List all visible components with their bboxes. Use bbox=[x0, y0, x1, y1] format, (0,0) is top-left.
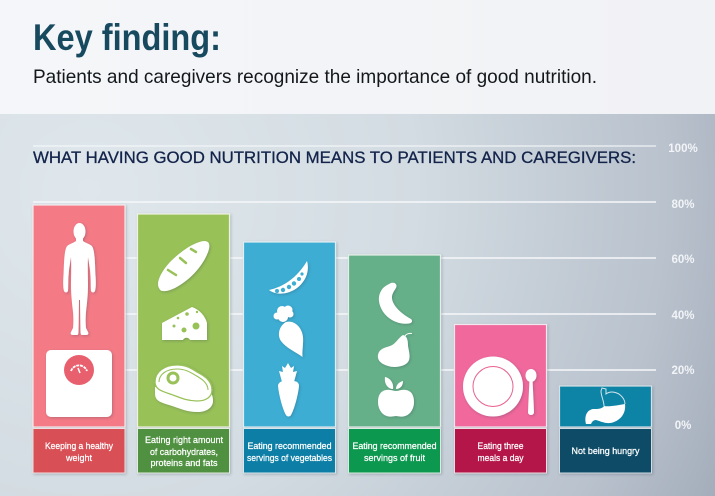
icon: bread bbox=[158, 241, 209, 291]
bar: not being hungry bbox=[560, 386, 652, 473]
bar label: Eating three bbox=[478, 441, 524, 452]
chart heading: WHAT HAVING GOOD NUTRITION MEANS TO PATIENTS AND CAREGIVERS: bbox=[33, 148, 636, 167]
grid lines and axis: 40% bbox=[671, 310, 695, 322]
grid lines and axis: 60% bbox=[671, 254, 695, 266]
chart panel background bbox=[0, 114, 715, 496]
bar label: proteins and fats bbox=[150, 458, 218, 469]
icon: pea pod bbox=[269, 261, 308, 294]
icon: human figure bbox=[63, 223, 96, 335]
bar label: of carbohydrates, bbox=[150, 447, 218, 458]
bar label: Eating recommended bbox=[352, 441, 436, 452]
grid lines and axis: 100% bbox=[668, 143, 698, 155]
bar label: servings of vegetables bbox=[247, 453, 332, 464]
bar label bbox=[478, 441, 524, 464]
icon: banana bbox=[379, 283, 412, 324]
bar label bbox=[45, 441, 113, 464]
grid lines and axis: 80% bbox=[671, 199, 695, 211]
bar: vegetables bbox=[244, 242, 336, 473]
bar: three meals a day bbox=[454, 324, 546, 473]
bar label: Not being hungry bbox=[572, 446, 640, 457]
grid lines and axis bbox=[33, 143, 698, 432]
bar label: Eating recommended bbox=[248, 441, 332, 452]
icon: stomach bbox=[585, 388, 625, 424]
bar: fruit bbox=[348, 255, 440, 473]
icon: pear bbox=[378, 333, 412, 367]
bar label bbox=[247, 441, 332, 464]
icon: bathroom scale bbox=[46, 350, 112, 417]
title: Key finding: bbox=[33, 17, 221, 58]
bar label: servings of fruit bbox=[364, 453, 425, 464]
icon: beet bbox=[274, 306, 303, 357]
bar: carbohydrates, proteins and fats bbox=[138, 214, 230, 473]
bar label: Eating right amount bbox=[145, 435, 223, 446]
bar label: Keeping a healthy bbox=[45, 441, 113, 452]
icon: carrot bbox=[278, 363, 299, 416]
bar label bbox=[145, 435, 223, 469]
bar label: meals a day bbox=[478, 453, 524, 464]
bar: keeping a healthy weight bbox=[33, 205, 125, 473]
bar label: weight bbox=[65, 453, 92, 464]
bar label bbox=[352, 441, 436, 464]
icon: apple bbox=[378, 377, 414, 417]
icon: plate and spoon bbox=[463, 356, 536, 416]
icon: steak bbox=[155, 365, 213, 412]
icon: cheese bbox=[162, 307, 207, 340]
header background bbox=[0, 0, 715, 114]
grid lines and axis: 20% bbox=[671, 365, 695, 377]
grid lines and axis: 0% bbox=[675, 420, 691, 432]
subtitle: Patients and caregivers recognize the importance of good nutrition. bbox=[33, 66, 597, 88]
